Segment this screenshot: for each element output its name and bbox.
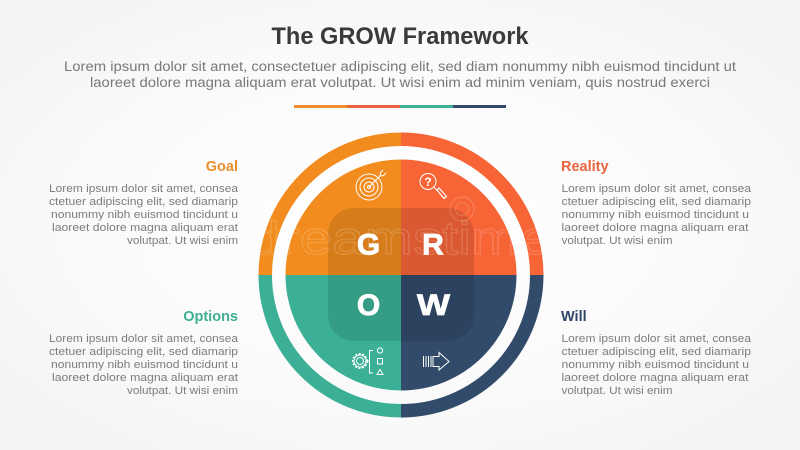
intro text: Lorem ipsum dolor sit amet, consectetuer adipiscing elit, sed diam nonummy nibh euismod tincidunt ut bbox=[64, 59, 736, 74]
body text: Will: volutpat. Ut wisi enim bbox=[562, 385, 672, 397]
heading: Options: Options bbox=[183, 309, 238, 325]
icon: target bbox=[356, 170, 386, 200]
body text: Will: nonummy nibh euismod tincidunt u bbox=[562, 359, 749, 371]
body text: Reality: laoreet dolore magna aliquam erat bbox=[562, 222, 748, 234]
body text: Reality: Lorem ipsum dolor sit amet, consea bbox=[562, 183, 752, 195]
icon: magnifier with question mark: ? bbox=[424, 175, 432, 189]
panel: Goal bbox=[49, 159, 239, 247]
inner disc quadrant: R bbox=[401, 160, 516, 275]
body text: Will: laoreet dolore magna aliquam erat bbox=[562, 372, 748, 384]
panel: Will bbox=[561, 309, 752, 397]
letter G: G bbox=[357, 228, 380, 262]
letter R: R bbox=[422, 228, 444, 262]
watermark: dreamstime bbox=[248, 212, 552, 264]
body text: Options bbox=[49, 333, 239, 397]
letter W: W bbox=[417, 289, 451, 322]
body text: Options: nonummy nibh euismod tincidunt u bbox=[51, 359, 238, 371]
body text: Will: ctetuer adipiscing elit, sed diamarip bbox=[562, 346, 751, 358]
icon: gear with options bbox=[353, 348, 383, 374]
central rounded square bbox=[328, 208, 474, 341]
body text: Options: volutpat. Ut wisi enim bbox=[127, 385, 238, 397]
body text: Options: laoreet dolore magna aliquam erat bbox=[52, 372, 238, 384]
icon: magnifier with question mark bbox=[420, 174, 446, 198]
outer ring: four coloured segments bbox=[265, 139, 537, 411]
body text: Reality: ctetuer adipiscing elit, sed diamarip bbox=[562, 196, 751, 208]
GROW circle diagram bbox=[248, 139, 552, 411]
intro text bbox=[64, 59, 736, 90]
body text: Goal bbox=[49, 183, 239, 247]
icon: arrow forward bbox=[424, 352, 449, 370]
body text: Options: ctetuer adipiscing elit, sed diamarip bbox=[49, 346, 238, 358]
panel: Options bbox=[49, 309, 239, 397]
inner disc quadrant: O bbox=[286, 275, 401, 390]
body text: Reality: volutpat. Ut wisi enim bbox=[562, 235, 672, 247]
body text: Will: Lorem ipsum dolor sit amet, consea bbox=[562, 333, 752, 345]
body text: Reality bbox=[562, 183, 752, 247]
body text: Will bbox=[562, 333, 752, 397]
heading: Will: Will bbox=[561, 309, 587, 325]
title divider bar bbox=[294, 105, 506, 108]
body text: Options: Lorem ipsum dolor sit amet, consea bbox=[49, 333, 239, 345]
body text: Goal: Lorem ipsum dolor sit amet, consea bbox=[49, 183, 239, 195]
title: The GROW Framework bbox=[272, 23, 529, 50]
body text: Goal: nonummy nibh euismod tincidunt u bbox=[51, 209, 238, 221]
body text: Goal: ctetuer adipiscing elit, sed diamarip bbox=[49, 196, 238, 208]
body text: Reality: nonummy nibh euismod tincidunt u bbox=[562, 209, 749, 221]
panel: Reality bbox=[561, 159, 752, 247]
heading: Goal: Goal bbox=[206, 159, 238, 175]
heading: Reality: Reality bbox=[561, 159, 609, 175]
body text: Goal: laoreet dolore magna aliquam erat bbox=[52, 222, 238, 234]
inner disc quadrant: W bbox=[401, 275, 516, 390]
letter O: O bbox=[357, 289, 380, 322]
watermark bbox=[248, 197, 552, 264]
body text: Goal: volutpat. Ut wisi enim bbox=[127, 235, 238, 247]
inner disc quadrant: G bbox=[286, 160, 401, 275]
intro text: laoreet dolore magna aliquam erat volutpat. Ut wisi enim ad minim veniam, quis nostrud exerci bbox=[90, 75, 710, 90]
